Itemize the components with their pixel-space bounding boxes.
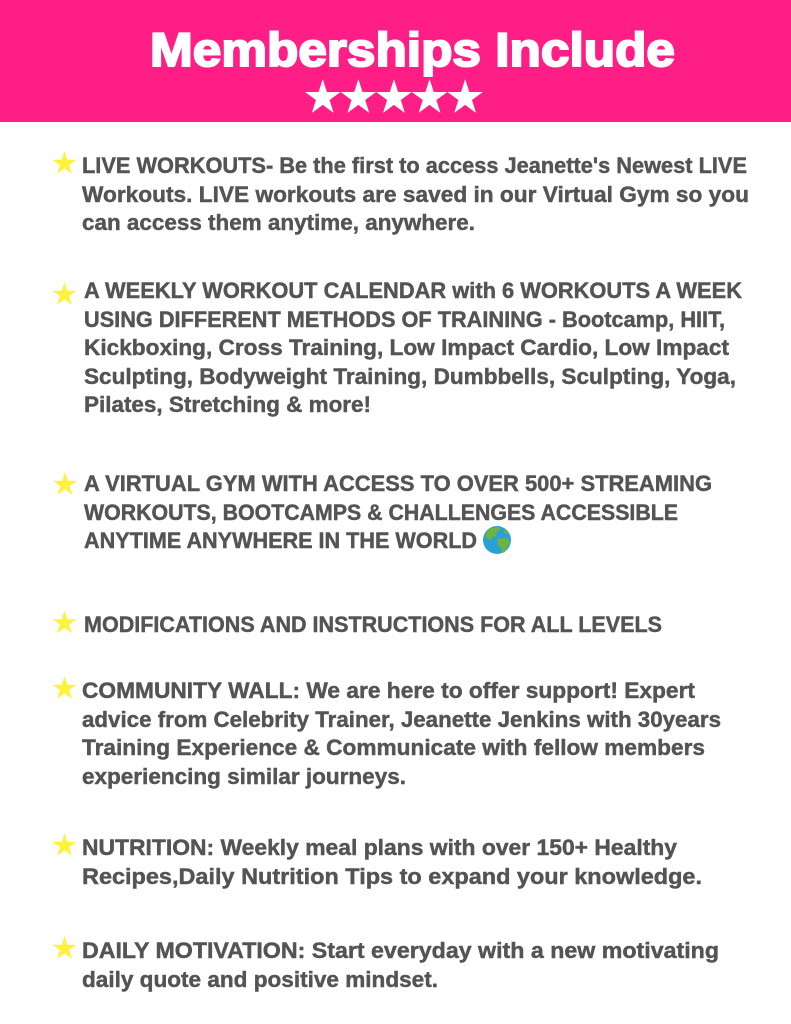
list item: daily motivation <box>52 936 719 992</box>
list item: community wall <box>52 676 721 789</box>
icon: yellow star <box>52 610 76 633</box>
text: live workouts: Workouts. LIVE workouts are saved in our Virtual Gym so you <box>82 182 749 207</box>
icon: yellow star <box>52 833 76 856</box>
icon: yellow star <box>52 676 76 699</box>
text: weekly workout calendar: Pilates, Stretching & more! <box>84 392 371 417</box>
icon: yellow star <box>52 282 76 305</box>
text: weekly workout calendar: A WEEKLY WORKOUT CALENDAR with 6 WORKOUTS A WEEK <box>84 278 742 303</box>
list item: nutrition <box>52 833 702 889</box>
icon: yellow star <box>52 151 76 174</box>
icon: yellow star <box>53 472 77 495</box>
text: nutrition: Recipes,Daily Nutrition Tips to expand your knowledge. <box>82 864 702 889</box>
text: daily motivation: daily quote and positive mindset. <box>82 967 438 992</box>
text: live workouts: can access them anytime, anywhere. <box>82 210 475 235</box>
icon: globe <box>483 526 511 554</box>
text: live workouts <box>82 153 749 235</box>
text: community wall: Training Experience & Communicate with fellow members <box>82 735 705 760</box>
text: daily motivation <box>82 938 719 992</box>
text: community wall <box>82 678 721 789</box>
text: nutrition: NUTRITION: Weekly meal plans with over 150+ Healthy <box>82 835 678 860</box>
text: weekly workout calendar <box>84 278 742 417</box>
list item: weekly workout calendar <box>52 278 742 417</box>
list item: modifications <box>52 610 662 637</box>
text: community wall: COMMUNITY WALL: We are here to offer support! Expert <box>82 678 696 703</box>
text: weekly workout calendar: USING DIFFERENT METHODS OF TRAINING - Bootcamp, HIIT, <box>84 307 725 332</box>
title: Memberships Include <box>150 23 675 76</box>
header banner <box>0 0 791 122</box>
text: virtual gym: WORKOUTS, BOOTCAMPS & CHALLENGES ACCESSIBLE <box>84 500 678 525</box>
text: community wall: experiencing similar journeys. <box>82 764 406 789</box>
text: nutrition <box>82 835 702 889</box>
text: virtual gym <box>84 471 712 553</box>
text: weekly workout calendar: Kickboxing, Cross Training, Low Impact Cardio, Low Impact <box>84 335 730 360</box>
text: virtual gym: A VIRTUAL GYM WITH ACCESS TO OVER 500+ STREAMING <box>84 471 712 496</box>
text: modifications: MODIFICATIONS AND INSTRUCTIONS FOR ALL LEVELS <box>84 612 662 637</box>
text: live workouts: LIVE WORKOUTS- Be the first to access Jeanette's Newest LIVE <box>82 153 747 178</box>
list item: virtual gym <box>53 471 712 554</box>
list item: live workouts <box>52 151 749 235</box>
text: daily motivation: DAILY MOTIVATION: Start everyday with a new motivating <box>82 938 719 963</box>
text: virtual gym: ANYTIME ANYWHERE IN THE WORLD <box>84 528 477 553</box>
text: community wall: advice from Celebrity Trainer, Jeanette Jenkins with 30years <box>82 707 721 732</box>
text: weekly workout calendar: Sculpting, Bodyweight Training, Dumbbells, Sculpting, Yoga, <box>84 364 736 389</box>
icon: yellow star <box>52 936 76 959</box>
icon: five white stars <box>305 79 483 113</box>
